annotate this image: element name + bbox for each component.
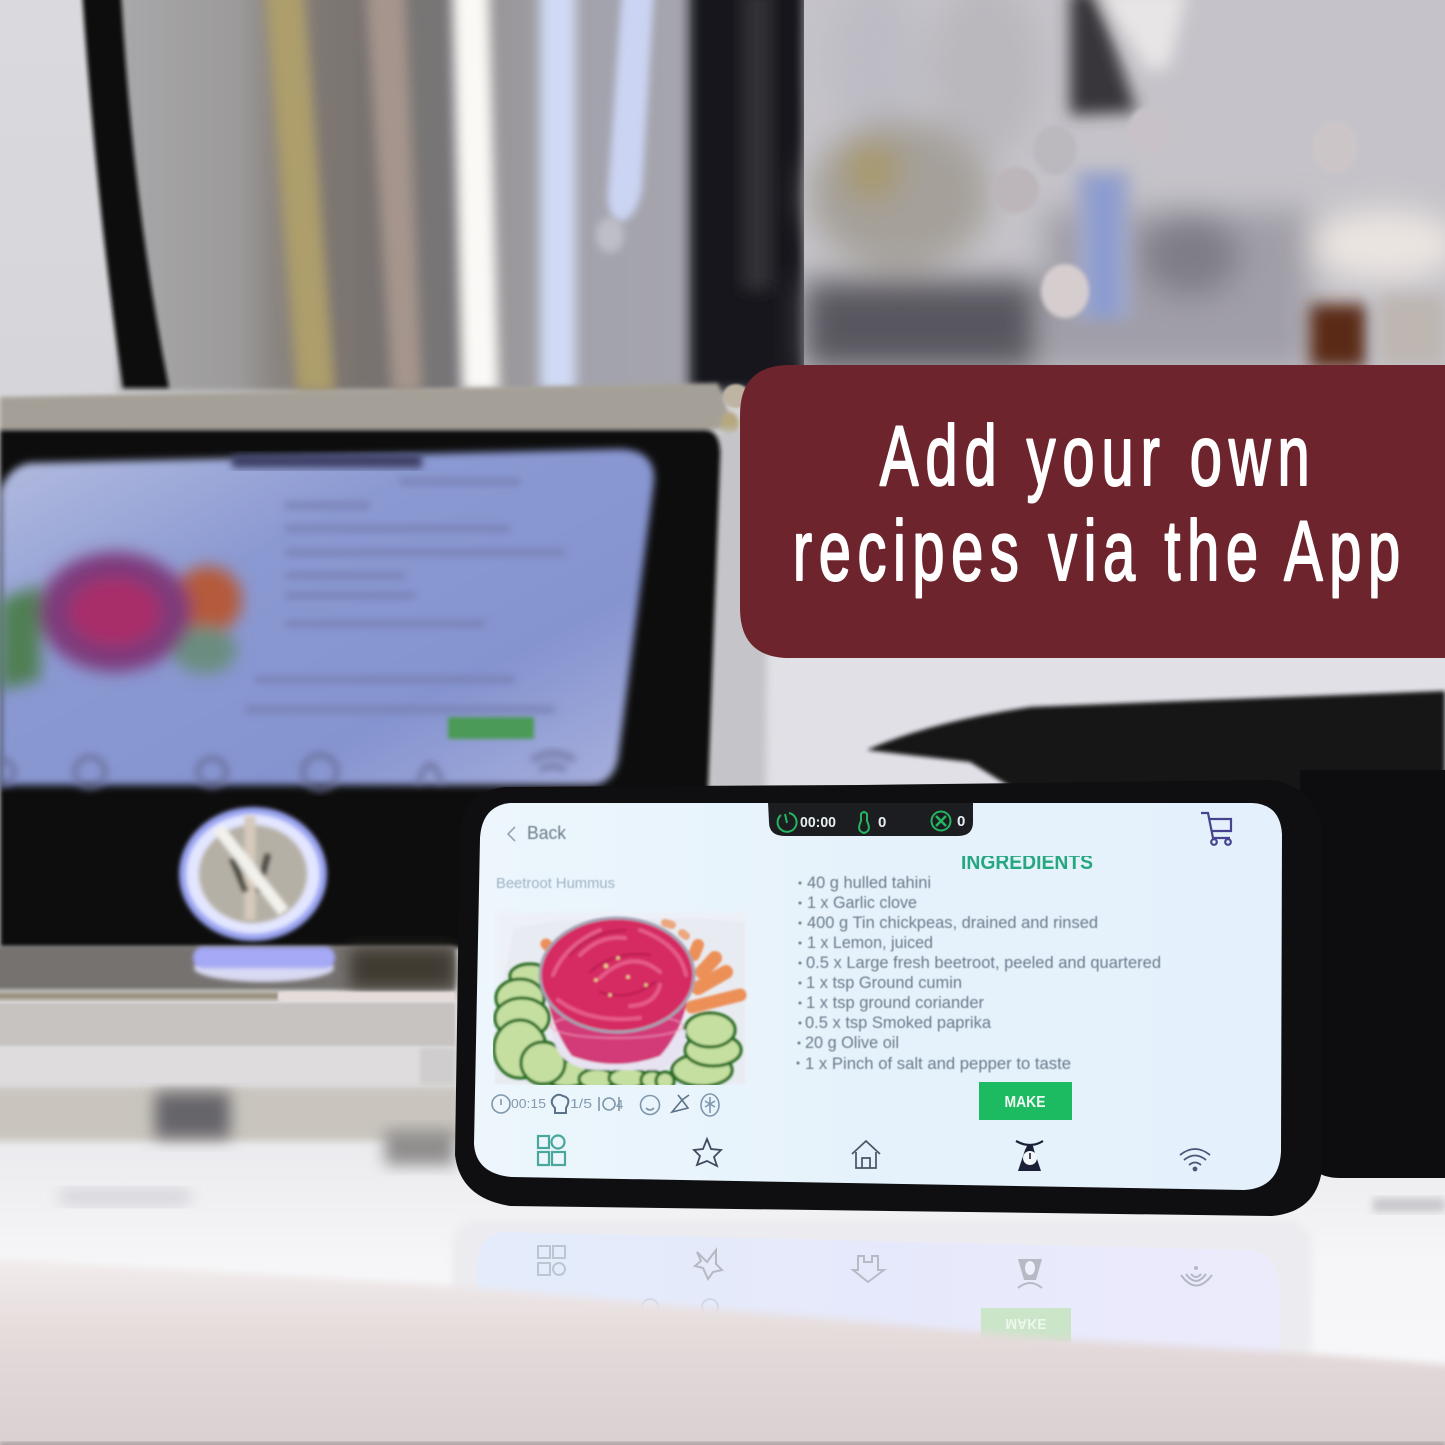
phone screen bbox=[474, 803, 1282, 1190]
icon: favourites bbox=[694, 1139, 721, 1166]
background: wall bbox=[0, 0, 1445, 800]
icon: beet bbox=[672, 1095, 689, 1112]
temperature value: 0 bbox=[878, 814, 886, 831]
ingredient list: 40 g hulled tahini bbox=[807, 873, 931, 892]
stat: difficulty bbox=[552, 1095, 592, 1113]
icon: scale bbox=[1016, 1141, 1043, 1171]
back link: Back bbox=[527, 823, 567, 843]
device base bands bbox=[0, 946, 455, 1084]
recipe title: Beetroot Hummus bbox=[496, 875, 615, 892]
dark appliance lid on the right bbox=[867, 691, 1445, 1178]
recipe photo bbox=[494, 912, 747, 1090]
banner bbox=[740, 365, 1445, 658]
banner line 2: recipes via the App bbox=[793, 504, 1400, 599]
phone bbox=[455, 780, 1322, 1216]
stat: time bbox=[492, 1095, 546, 1113]
timer value: 00:00 bbox=[800, 814, 836, 831]
timer icon bbox=[778, 813, 797, 832]
make button bbox=[979, 1082, 1072, 1120]
phone body bbox=[455, 780, 1322, 1216]
blurred text lines on device bbox=[245, 478, 565, 713]
icon: baby bbox=[640, 1096, 660, 1114]
ingredient list: 1 x Lemon, juiced bbox=[807, 933, 933, 952]
hummus bowl bbox=[547, 1001, 688, 1066]
temperature icon bbox=[859, 812, 869, 833]
stat: servings: 4 bbox=[616, 1097, 623, 1112]
device top silver edge bbox=[0, 383, 735, 430]
bottom table edge bbox=[0, 1442, 1445, 1445]
bowl napkin bbox=[552, 1030, 686, 1070]
ingredients heading: INGREDIENTS bbox=[961, 851, 1093, 874]
icon: home bbox=[852, 1141, 880, 1168]
ingredient list: 1 x tsp ground coriander bbox=[806, 993, 984, 1012]
cucumber slices left bbox=[494, 964, 674, 1090]
stat: difficulty: 1/5 bbox=[570, 1096, 592, 1111]
device dial ring bbox=[179, 807, 327, 941]
ingredient list: 1 x tsp Ground cumin bbox=[806, 973, 962, 992]
device corner highlight bbox=[721, 412, 739, 436]
ingredient list: 20 g Olive oil bbox=[805, 1033, 899, 1052]
device black panel bbox=[0, 430, 720, 948]
carrots bbox=[546, 921, 740, 1007]
blurred device icons bbox=[0, 754, 575, 789]
background: wall and counter right of device bbox=[750, 655, 1445, 795]
blurred screen notch bbox=[232, 454, 422, 468]
hummus swirls bbox=[553, 930, 686, 1019]
ingredient list: 1 x Pinch of salt and pepper to taste bbox=[805, 1054, 1071, 1073]
stat: time: 00:15 bbox=[511, 1096, 546, 1111]
phone reflection on the table bbox=[452, 1220, 1312, 1370]
reflected icons bbox=[538, 1246, 1212, 1315]
blurred make button on device bbox=[448, 717, 534, 739]
blurred glassware background bbox=[803, 0, 1445, 370]
speed icon bbox=[932, 812, 950, 830]
stat: servings bbox=[599, 1097, 623, 1112]
icon: cart bbox=[1201, 813, 1231, 845]
speed value: 0 bbox=[957, 813, 965, 830]
phone screen contents bbox=[492, 802, 1231, 1171]
ingredient list bbox=[796, 873, 1161, 1073]
device right silver strip bbox=[708, 430, 768, 790]
ingredient list: 0.5 x tsp Smoked paprika bbox=[805, 1013, 992, 1032]
ingredient list: 1 x Garlic clove bbox=[807, 893, 917, 912]
dial reflection bbox=[193, 947, 335, 982]
banner panel bbox=[740, 365, 1445, 658]
table top bbox=[0, 1085, 1445, 1445]
table marble and device shadow bbox=[0, 1086, 1445, 1212]
cucumber slices right bbox=[672, 1013, 741, 1086]
ingredient list: 400 g Tin chickpeas, drained and rinsed bbox=[807, 913, 1098, 932]
icon: categories bbox=[538, 1136, 565, 1165]
icon: wheat bbox=[701, 1094, 719, 1116]
blurred cooking device bbox=[0, 383, 768, 1084]
bokeh highlight bbox=[723, 384, 749, 408]
ingredient list: 0.5 x Large fresh beetroot, peeled and quartered bbox=[806, 953, 1161, 972]
counter front edge bbox=[0, 1258, 1445, 1445]
device screen bbox=[0, 449, 654, 785]
status notch bbox=[768, 802, 973, 836]
reflected make button: MAKE bbox=[1006, 1315, 1046, 1332]
back link bbox=[507, 824, 566, 842]
steel mixer jug bbox=[82, 0, 806, 392]
banner line 1: Add your own bbox=[880, 409, 1310, 504]
blurred recipe photo on device bbox=[0, 552, 242, 690]
recipe stats row bbox=[492, 1094, 719, 1116]
reflected make button bbox=[981, 1308, 1071, 1342]
make button: MAKE bbox=[1004, 1094, 1046, 1111]
icon: wifi bbox=[1180, 1149, 1210, 1170]
photo backdrop bbox=[497, 912, 747, 1085]
